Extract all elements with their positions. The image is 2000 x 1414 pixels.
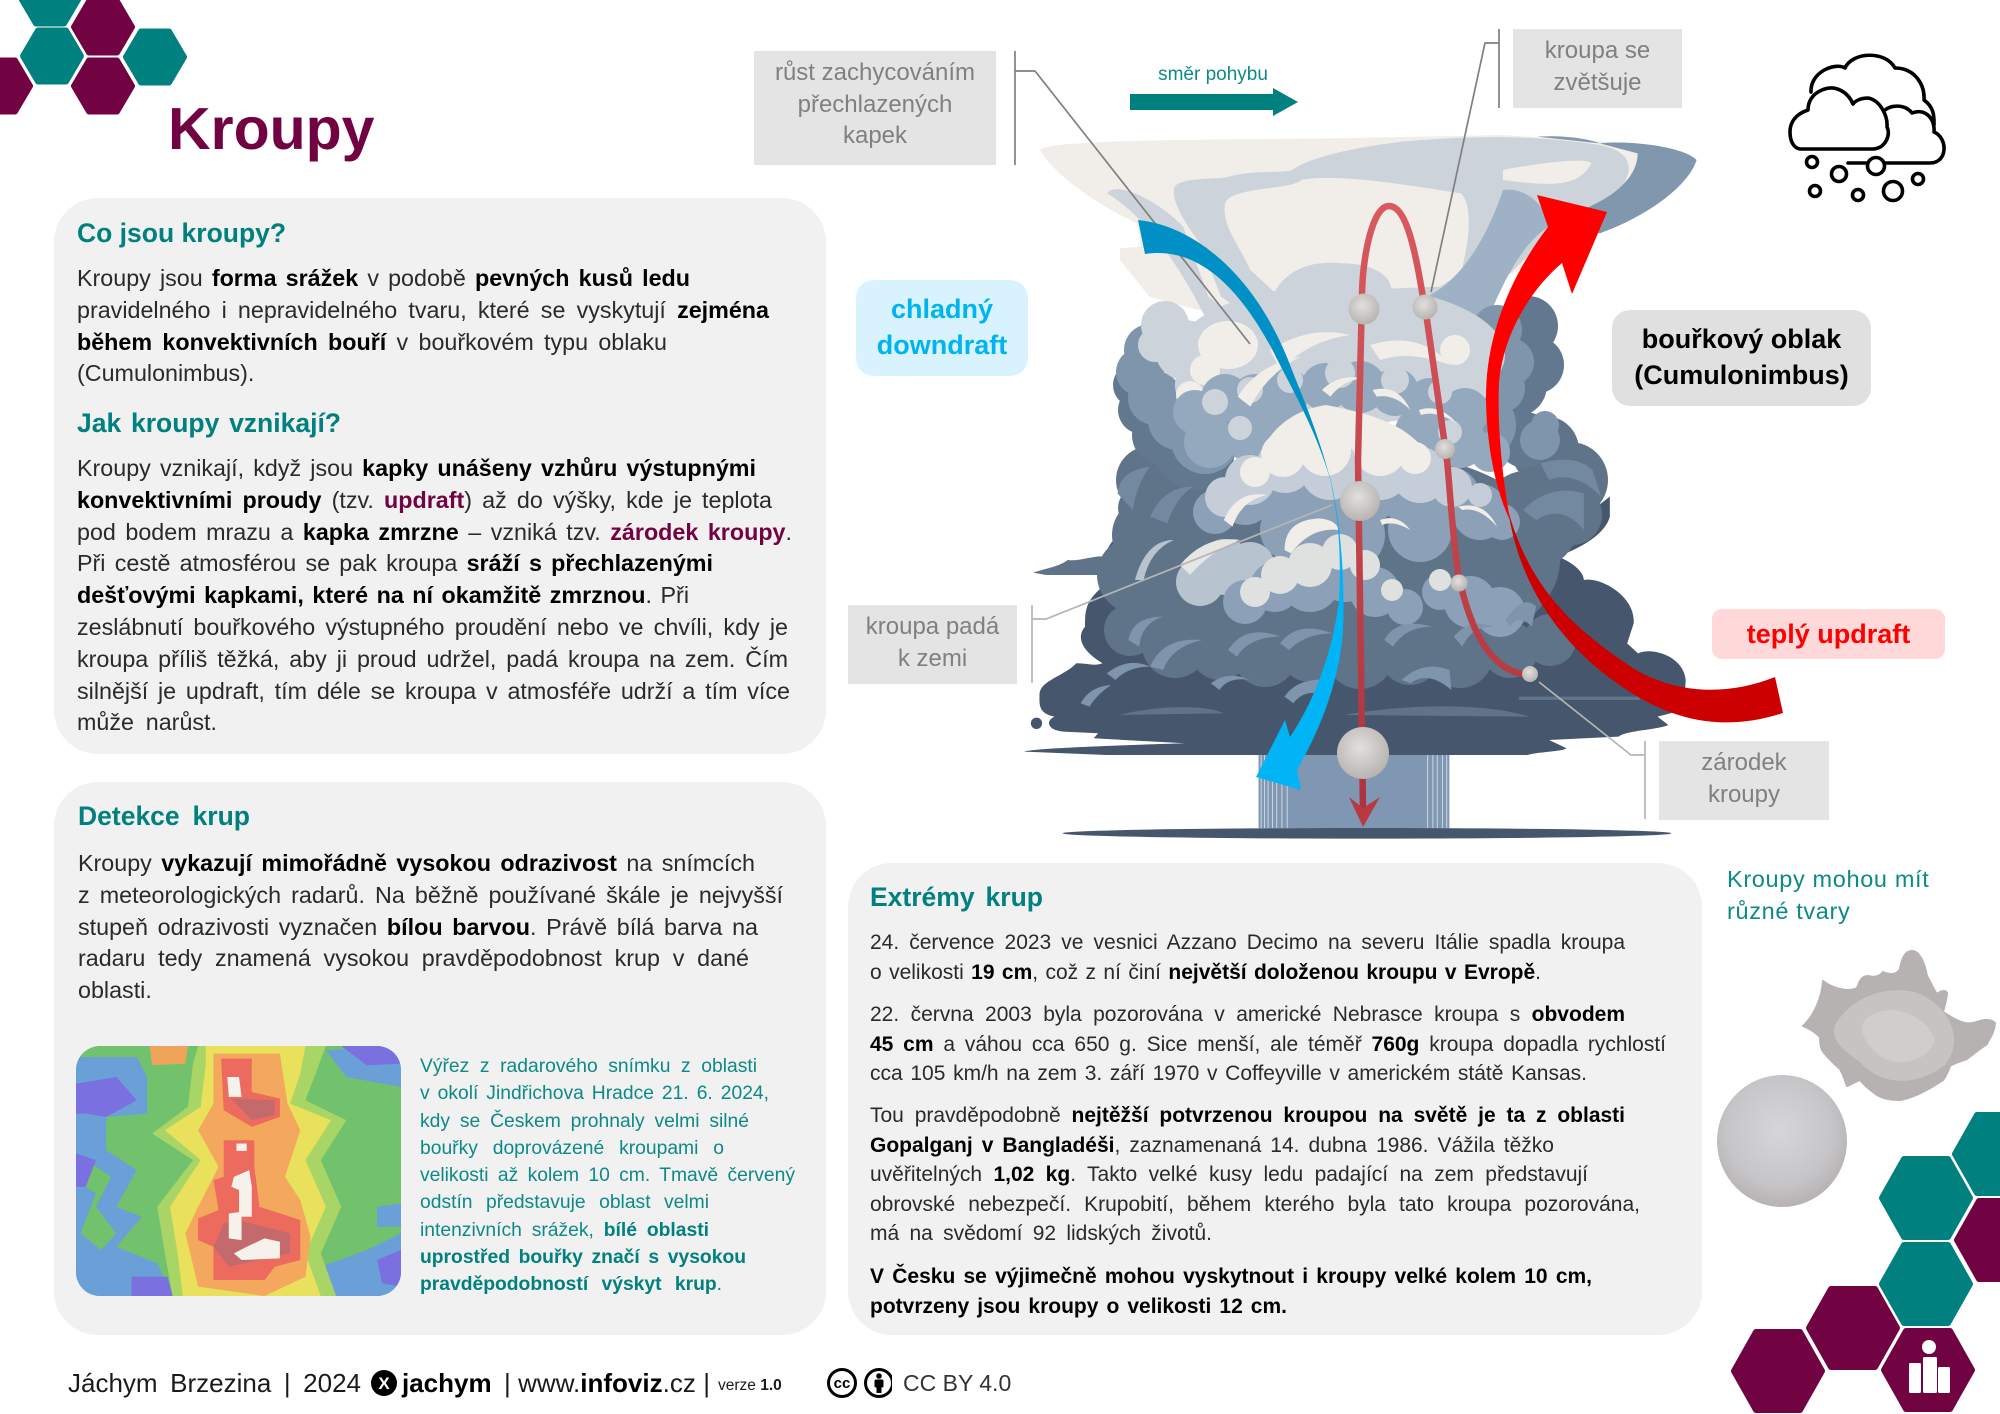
label: chladny downdraft bbox=[856, 280, 1028, 376]
radar image bbox=[76, 1046, 401, 1296]
arrow: direction of movement bbox=[1130, 88, 1298, 116]
text: hail formation: zeslábnutí bouřkového výstupného proudění nebo ve chvíli, kdy je bbox=[77, 614, 788, 640]
text: Bangladesh record: uvěřitelných 1,02 kg. Takto velké kusy ledu padající na zem představují bbox=[870, 1163, 1588, 1186]
text: Azzano Decimo record: o velikosti 19 cm, což z ní činí největší doloženou kroupu v Evropě. bbox=[870, 960, 1541, 984]
caption: radar image: uprostřed bouřky značí s vysokou bbox=[420, 1247, 746, 1268]
text: Azzano Decimo record bbox=[870, 931, 1626, 984]
text: definition of hail bbox=[77, 265, 770, 386]
label: teply updraft bbox=[1712, 609, 1945, 659]
text: kroupy mohou mit ruzne tvary: různé tvary bbox=[1727, 898, 1850, 924]
text: hail formation: může narůst. bbox=[77, 709, 217, 735]
panel: co jsou kroupy bbox=[54, 198, 826, 754]
text: hail formation: dešťovými kapkami, které na ní okamžitě zmrznou. Při bbox=[77, 582, 689, 608]
label: bourkovy oblak: bouřkový oblak bbox=[1642, 324, 1841, 354]
text: kroupy mohou mit ruzne tvary: Kroupy mohou mít bbox=[1727, 866, 1929, 892]
caption: radar image: kdy se Českem prohnaly velmi silné bbox=[420, 1110, 749, 1132]
text: radar detection: stupeň odrazivosti vyznačen bílou barvou. Právě bílá barva na bbox=[78, 914, 758, 940]
label: kroupa se zvetsuje: zvětšuje bbox=[1553, 69, 1642, 96]
text: Czech extremes: potvrzeny jsou kroupy o velikosti 12 cm. bbox=[870, 1294, 1287, 1318]
text: Bangladesh record bbox=[870, 1104, 1640, 1245]
footer: author and year: Jáchym Brzezina | 2024 bbox=[68, 1368, 361, 1398]
leader line: zarodek bbox=[1539, 682, 1645, 819]
icon: infoviz logo bbox=[1909, 1340, 1950, 1393]
leader line: rust zachycovanim bbox=[1015, 51, 1250, 344]
text: radar detection bbox=[78, 850, 783, 1003]
label: rust zachycovanim bbox=[754, 51, 996, 165]
caption: radar image: Výřez z radarového snímku z oblasti bbox=[420, 1056, 757, 1077]
text: Czech extremes bbox=[870, 1264, 1592, 1318]
label: kroupa se zvetsuje: kroupa se bbox=[1545, 37, 1650, 64]
label: kroupa pada k zemi: kroupa padá bbox=[866, 613, 999, 640]
text: definition of hail: (Cumulonimbus). bbox=[77, 360, 254, 386]
heading: Detekce krup: Detekce krup bbox=[78, 801, 250, 831]
icon: creative commons: cc bbox=[834, 1375, 850, 1392]
label: bourkovy oblak: (Cumulonimbus) bbox=[1634, 360, 1849, 390]
hailstone trajectory bbox=[1349, 206, 1529, 827]
text: American records: 22. června 2003 byla pozorována v americké Nebrasce kroupa s obvodem bbox=[870, 1003, 1625, 1026]
text: hail formation: kroupa příliš těžká, aby ji proud udržel, padá kroupa na zem. Čím bbox=[77, 646, 788, 672]
text: kroupy mohou mit ruzne tvary bbox=[1727, 866, 1929, 924]
heading: Extremy krup: Extrémy krup bbox=[870, 882, 1043, 912]
caption: radar image: v okolí Jindřichova Hradce 21. 6. 2024, bbox=[420, 1083, 769, 1104]
text: Czech extremes: V Česku se výjimečně mohou vyskytnout i kroupy velké kolem 10 cm, bbox=[870, 1265, 1592, 1288]
text: hail formation: Při cestě atmosférou se pak kroupa sráží s přechlazenými bbox=[77, 550, 713, 576]
text: Bangladesh record: má na svědomí 92 lidských životů. bbox=[870, 1222, 1212, 1245]
label: chladny downdraft: downdraft bbox=[877, 330, 1007, 360]
leader line: kroupa pada bbox=[1032, 505, 1332, 683]
text: hail formation: pod bodem mrazu a kapka zmrzne – vzniká tzv. zárodek kroupy. bbox=[77, 519, 792, 545]
caption: radar image: intenzivních srážek, bílé oblasti bbox=[420, 1220, 709, 1240]
illustration: irregular hailstone bbox=[1803, 951, 1995, 1100]
panel: extremy krup bbox=[848, 863, 1702, 1335]
footer bbox=[68, 1368, 1011, 1398]
heading: Jak kroupy vznikaji: Jak kroupy vznikají? bbox=[77, 408, 341, 438]
icon: X logo: X bbox=[378, 1374, 390, 1393]
text: radar detection: oblasti. bbox=[78, 977, 152, 1003]
caption: radar image: velikosti až kolem 10 cm. Tmavě červený bbox=[420, 1165, 795, 1186]
text: American records bbox=[870, 1003, 1666, 1085]
label: zarodek kroupy: zárodek bbox=[1701, 749, 1787, 776]
text: American records: cca 105 km/h na zem 3. září 1970 v Coffeyville v americkém státě Kansas. bbox=[870, 1062, 1587, 1085]
text: hail formation: konvektivními proudy (tzv. updraft) až do výšky, kde je teplota bbox=[77, 487, 772, 513]
label: rust zachycovanim: přechlazených bbox=[798, 91, 952, 118]
label: bourkovy oblak bbox=[1612, 310, 1871, 406]
label: zarodek kroupy bbox=[1659, 741, 1829, 820]
text: radar detection: radaru tedy znamená vysokou pravděpodobnost krup v dané bbox=[78, 945, 749, 971]
arrow: cold downdraft bbox=[1138, 220, 1344, 790]
label: rust zachycovanim: kapek bbox=[843, 122, 907, 149]
caption: radar image: pravděpodobností výskyt krup. bbox=[420, 1274, 722, 1295]
text: definition of hail: pravidelného i nepravidelného tvaru, které se vyskytují zejména bbox=[77, 297, 769, 323]
panel: detekce krup bbox=[54, 782, 826, 1335]
text: Bangladesh record: Gopalganj v Bangladéši, zaznamenaná 14. dubna 1986. Vážila těžko bbox=[870, 1134, 1554, 1156]
text: hail formation: silnější je updraft, tím déle se kroupa v atmosféře udrží a tím více bbox=[77, 678, 790, 704]
label: kroupa pada k zemi: k zemi bbox=[898, 645, 967, 672]
hailstones on trajectory bbox=[1337, 294, 1538, 779]
illustration: round hailstone bbox=[1717, 1075, 1847, 1207]
text: Bangladesh record: Tou pravděpodobně nejtěžší potvrzenou kroupou na světě je ta z oblasti bbox=[870, 1104, 1625, 1127]
text: definition of hail: Kroupy jsou forma srážek v podobě pevných kusů ledu bbox=[77, 265, 690, 291]
text: definition of hail: během konvektivních bouří v bouřkovém typu oblaku bbox=[77, 329, 667, 355]
text: hail formation: Kroupy vznikají, když jsou kapky unášeny vzhůru výstupnými bbox=[77, 455, 756, 481]
label: zarodek kroupy: kroupy bbox=[1708, 781, 1780, 808]
heading: Co jsou kroupy: Co jsou kroupy? bbox=[77, 218, 286, 248]
label: kroupa se zvetsuje bbox=[1513, 29, 1682, 108]
hexagons: top-left decoration bbox=[0, 0, 184, 112]
icon: creative commons bbox=[827, 1368, 892, 1398]
label: teply updraft: teplý updraft bbox=[1747, 619, 1910, 649]
text: American records: 45 cm a váhou cca 650 g. Sice menší, ale téměř 760g kroupa dopadla rychlostí bbox=[870, 1032, 1666, 1056]
footer: website: | www.infoviz.cz | bbox=[504, 1368, 710, 1398]
caption: radar image bbox=[420, 1056, 795, 1295]
label: smer pohybu: směr pohybu bbox=[1158, 64, 1268, 85]
text: hail formation bbox=[77, 455, 792, 735]
caption: radar image: odstín představuje oblast velmi bbox=[420, 1192, 709, 1213]
hexagons: bottom-right decoration bbox=[1734, 1115, 2000, 1410]
caption: radar image: bouřky doprovázené kroupami o bbox=[420, 1138, 724, 1159]
text: radar detection: Kroupy vykazují mimořádně vysokou odrazivost na snímcích bbox=[78, 850, 755, 876]
icon: X logo bbox=[371, 1370, 397, 1396]
title: Kroupy bbox=[168, 96, 374, 162]
label: chladny downdraft: chladný bbox=[891, 294, 993, 324]
text: radar detection: z meteorologických radarů. Na běžně používané škále je nejvyšší bbox=[78, 882, 783, 908]
text: Azzano Decimo record: 24. července 2023 ve vesnici Azzano Decimo na severu Itálie spadla kroupa bbox=[870, 931, 1625, 954]
illustration: cumulonimbus cloud bbox=[1024, 135, 1697, 839]
footer: handle: jachym bbox=[402, 1368, 492, 1398]
footer: version: verze 1.0 bbox=[718, 1377, 782, 1394]
text: Bangladesh record: obrovské nebezpečí. Krupobití, během kterého byla tato kroupa pozorována, bbox=[870, 1192, 1640, 1216]
label: rust zachycovanim: růst zachycováním bbox=[775, 59, 975, 86]
arrow: warm updraft bbox=[1486, 195, 1783, 722]
leader line: kroupa se zvetsuje bbox=[1431, 29, 1499, 292]
label: kroupa pada k zemi bbox=[848, 605, 1017, 684]
icon: hail cloud bbox=[1790, 55, 1944, 201]
footer: license: CC BY 4.0 bbox=[903, 1370, 1011, 1396]
